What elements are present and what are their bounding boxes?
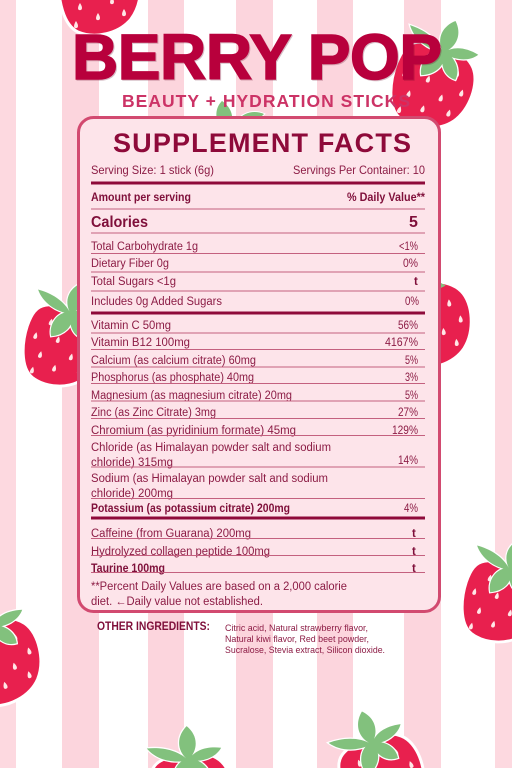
icon: strawberry behind title (380, 8, 492, 140)
icon: strawberry left lower (0, 609, 40, 707)
row: vitamin b12 (91, 337, 425, 350)
row: potassium (91, 503, 425, 518)
icon: strawberry bottom right (326, 712, 424, 768)
footnote: diet. ←Daily value not established. (91, 596, 263, 608)
row: taurine (91, 563, 425, 575)
row: magnesium (91, 390, 425, 402)
icon: strawberry bottom centre (146, 726, 225, 768)
table header: % Daily Value** (347, 192, 425, 204)
row: chloride: Chloride (as Himalayan powder salt and sodium (91, 442, 331, 454)
serving info: Serving Size: 1 stick (6g) (91, 163, 214, 177)
row: potassium: Potassium (as potassium citrate) 200mg (91, 503, 290, 515)
row: calcium: Calcium (as calcium citrate) 60mg (91, 355, 256, 367)
row: total sugars: Total Sugars <1g (91, 276, 176, 288)
row: vitamin c (91, 320, 425, 333)
heading: supplement facts: SUPPLEMENT FACTS (113, 128, 411, 158)
row: vitamin c: Vitamin C 50mg (91, 320, 171, 332)
row: chromium: 129% (392, 425, 418, 437)
row: sodium: chloride) 200mg (91, 488, 173, 500)
row: dietary fiber (91, 258, 425, 272)
row: vitamin c: 56% (398, 320, 418, 332)
row: dietary fiber: 0% (403, 258, 418, 270)
row: chromium: Chromium (as pyridinium formate) 45mg (91, 425, 296, 437)
icon: strawberry left (14, 273, 117, 396)
row: hydrolyzed collagen: Hydrolyzed collagen peptide 100mg (91, 546, 270, 558)
row: taurine: t (412, 563, 416, 575)
footnote (91, 581, 347, 608)
row: vitamin b12: Vitamin B12 100mg (91, 337, 190, 349)
footnote: **Percent Daily Values are based on a 2,000 calorie (91, 581, 347, 593)
row: total carbohydrate: Total Carbohydrate 1g (91, 241, 198, 253)
row: magnesium: 5% (405, 390, 418, 402)
icon: strawberry right of card (386, 277, 475, 371)
row: added sugars: Includes 0g Added Sugars (91, 296, 222, 308)
icon: strawberry leaves behind card top (216, 101, 264, 120)
other ingredients list (225, 623, 385, 655)
icon: strawberry top centre (62, 0, 138, 34)
row: chloride: 14% (398, 455, 418, 467)
row: dietary fiber: Dietary Fiber 0g (91, 258, 169, 270)
row: magnesium: Magnesium (as magnesium citrate) 20mg (91, 390, 292, 402)
row: total carbohydrate: <1% (399, 241, 418, 253)
row: caffeine (91, 528, 425, 540)
row: potassium: 4% (404, 503, 418, 515)
row: total carbohydrate (91, 241, 425, 254)
row: phosphorus: 3% (405, 372, 418, 384)
row: added sugars (91, 296, 425, 313)
row: phosphorus: Phosphorus (as phosphate) 40mg (91, 372, 254, 384)
row: calcium: 5% (405, 355, 418, 367)
calories row: 5 (409, 214, 418, 231)
serving info (91, 163, 425, 183)
row: caffeine: Caffeine (from Guarana) 200mg (91, 528, 251, 540)
row: sodium: Sodium (as Himalayan powder salt and sodium (91, 473, 328, 485)
table header: Amount per serving (91, 192, 191, 204)
other ingredients list: Sucralose, Stevia extract, Silicon dioxide. (225, 645, 385, 655)
calories row: Calories (91, 214, 148, 231)
row: calcium (91, 355, 425, 367)
row: zinc: Zinc (as Zinc Citrate) 3mg (91, 407, 216, 419)
calories row (91, 214, 425, 233)
row: total sugars: t (414, 276, 418, 288)
row: hydrolyzed collagen (91, 546, 425, 558)
row: total sugars (91, 276, 425, 291)
row: chloride (91, 442, 425, 469)
row: hydrolyzed collagen: t (412, 546, 416, 558)
serving info: Servings Per Container: 10 (293, 163, 425, 177)
row: added sugars: 0% (405, 296, 419, 308)
subtitle: BEAUTY + HYDRATION STICKS (122, 91, 410, 111)
row: zinc (91, 407, 425, 419)
other ingredients list: Natural kiwi flavor, Red beet powder, (225, 634, 369, 644)
table header (91, 192, 425, 209)
row: caffeine: t (412, 528, 416, 540)
other ingredients label: OTHER INGREDIENTS: (97, 621, 210, 633)
icon: strawberry right lower (464, 543, 512, 644)
row: sodium (91, 473, 425, 500)
row: taurine: Taurine 100mg (91, 563, 165, 575)
title: BERRY POP (72, 21, 442, 93)
row: zinc: 27% (398, 407, 418, 419)
panel: supplement facts card (78, 118, 440, 612)
row: chloride: chloride) 315mg (91, 457, 173, 469)
row: vitamin b12: 4167% (385, 337, 418, 349)
row: phosphorus (91, 372, 425, 384)
row: chromium (91, 425, 425, 437)
other ingredients list: Citric acid, Natural strawberry flavor, (225, 623, 368, 633)
